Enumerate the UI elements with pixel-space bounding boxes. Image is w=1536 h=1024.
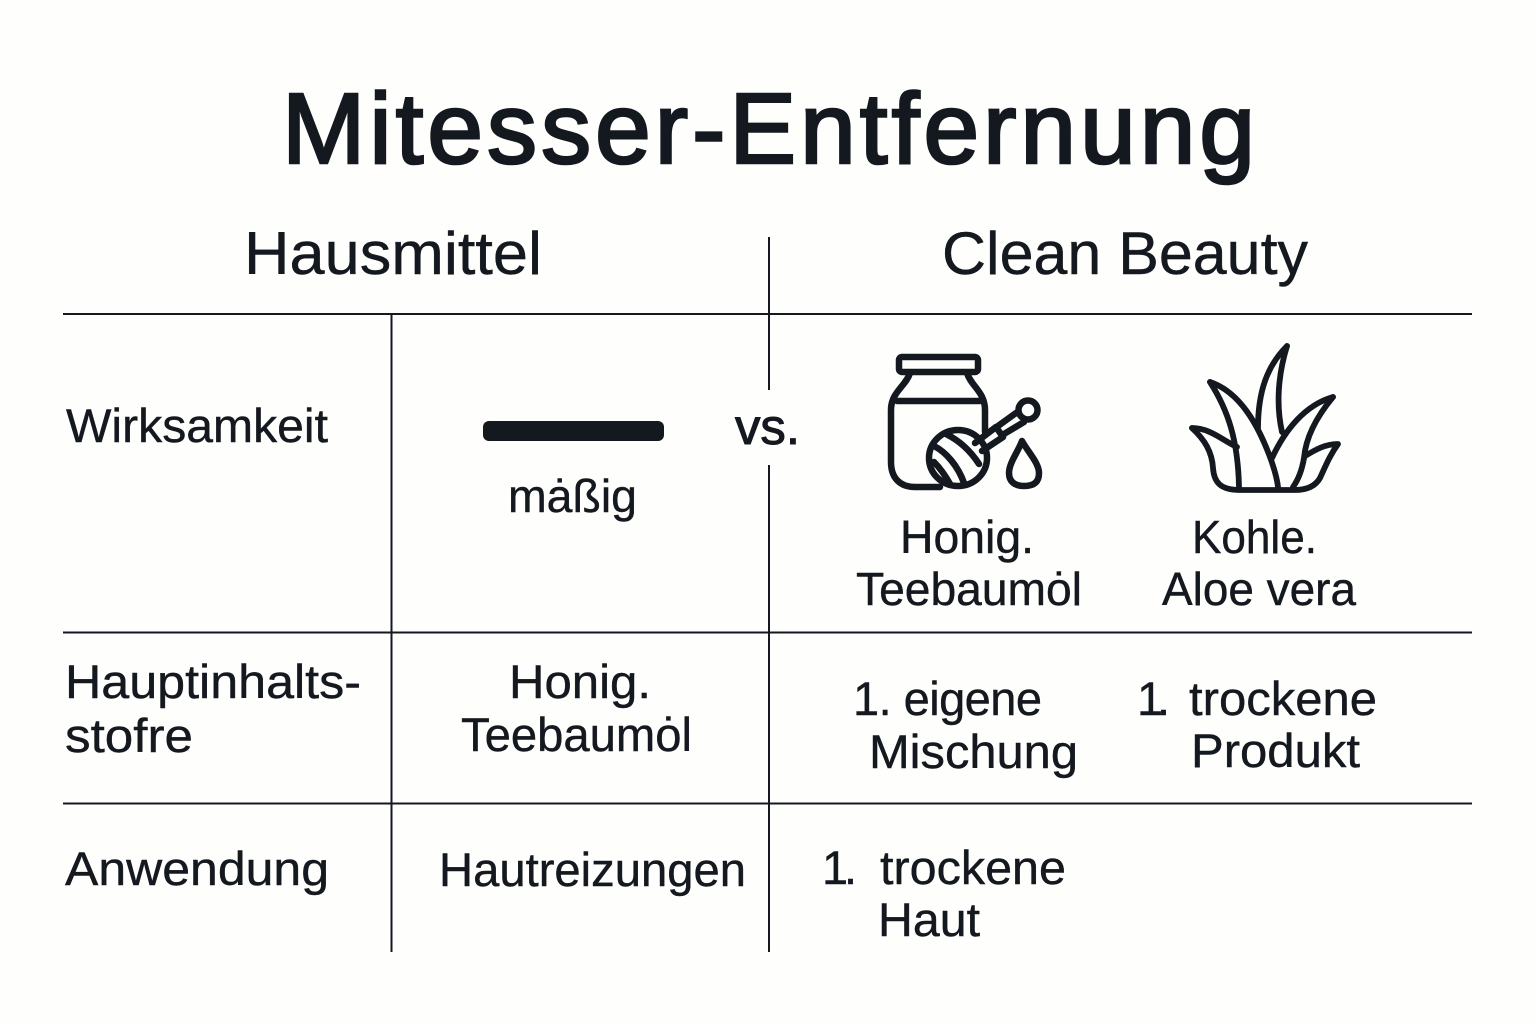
cell: trockene Haut: trockene (880, 841, 1066, 894)
cell: Honig, Teebaumöl (Clean Beauty) (856, 511, 1082, 615)
cell: Hautreizungen: Hautreizungen (439, 843, 746, 896)
cell: eigene Mischung: 1. eigene (853, 672, 1042, 725)
cell: trockene Produkt: 1 (1137, 672, 1163, 725)
cell: trockene Haut (822, 841, 1066, 946)
row label: Hauptinhaltsstoffe: Hauptinhalts- (65, 655, 361, 708)
rating label: mȧßig (508, 470, 637, 522)
icon: aloe vera plant (1192, 346, 1338, 490)
cell: Kohle, Aloe vera (1162, 511, 1356, 615)
icon: honey jar with dipper and drop (891, 357, 1039, 487)
rating bar (483, 421, 664, 441)
cell: Honig, Teebaumöl (Clean Beauty): Honig. (900, 511, 1034, 563)
row label: Hauptinhaltsstoffe: stofre (65, 709, 193, 762)
cell: trockene Produkt (1137, 672, 1377, 777)
vs label: vs. (735, 399, 800, 455)
row label: Hauptinhaltsstoffe (65, 655, 361, 762)
cell: Kohle, Aloe vera: Aloe vera (1162, 563, 1356, 615)
title: Mitesser-Entfernung (282, 73, 1255, 185)
cell: Honig, Teebaumöl (Clean Beauty): Teebaumȯl (856, 563, 1082, 615)
row label: Wirksamkeit: Wirksamkeit (66, 399, 328, 452)
row label: Anwendung: Anwendung (65, 842, 329, 895)
cell: Honig, Teebaumöl (Hausmittel): Teebaumȯl (461, 708, 692, 761)
cell: trockene Produkt: trockene (1189, 672, 1377, 725)
heading: Clean Beauty: Clean Beauty (942, 220, 1308, 287)
heading: Hausmittel: Hausmittel (244, 220, 542, 287)
cell: trockene Produkt: Produkt (1191, 724, 1360, 777)
cell: trockene Produkt: . (1157, 672, 1170, 725)
cell: Kohle, Aloe vera: Kohle. (1192, 511, 1317, 563)
cell: trockene Haut: . (844, 841, 857, 894)
cell: trockene Haut: 1 (822, 841, 848, 894)
cell: Honig, Teebaumöl (Hausmittel): Honig. (509, 655, 651, 708)
cell: Honig, Teebaumöl (Hausmittel) (461, 655, 692, 761)
cell: eigene Mischung (853, 672, 1078, 778)
cell: trockene Haut: Haut (878, 893, 980, 946)
cell: eigene Mischung: Mischung (869, 725, 1078, 778)
